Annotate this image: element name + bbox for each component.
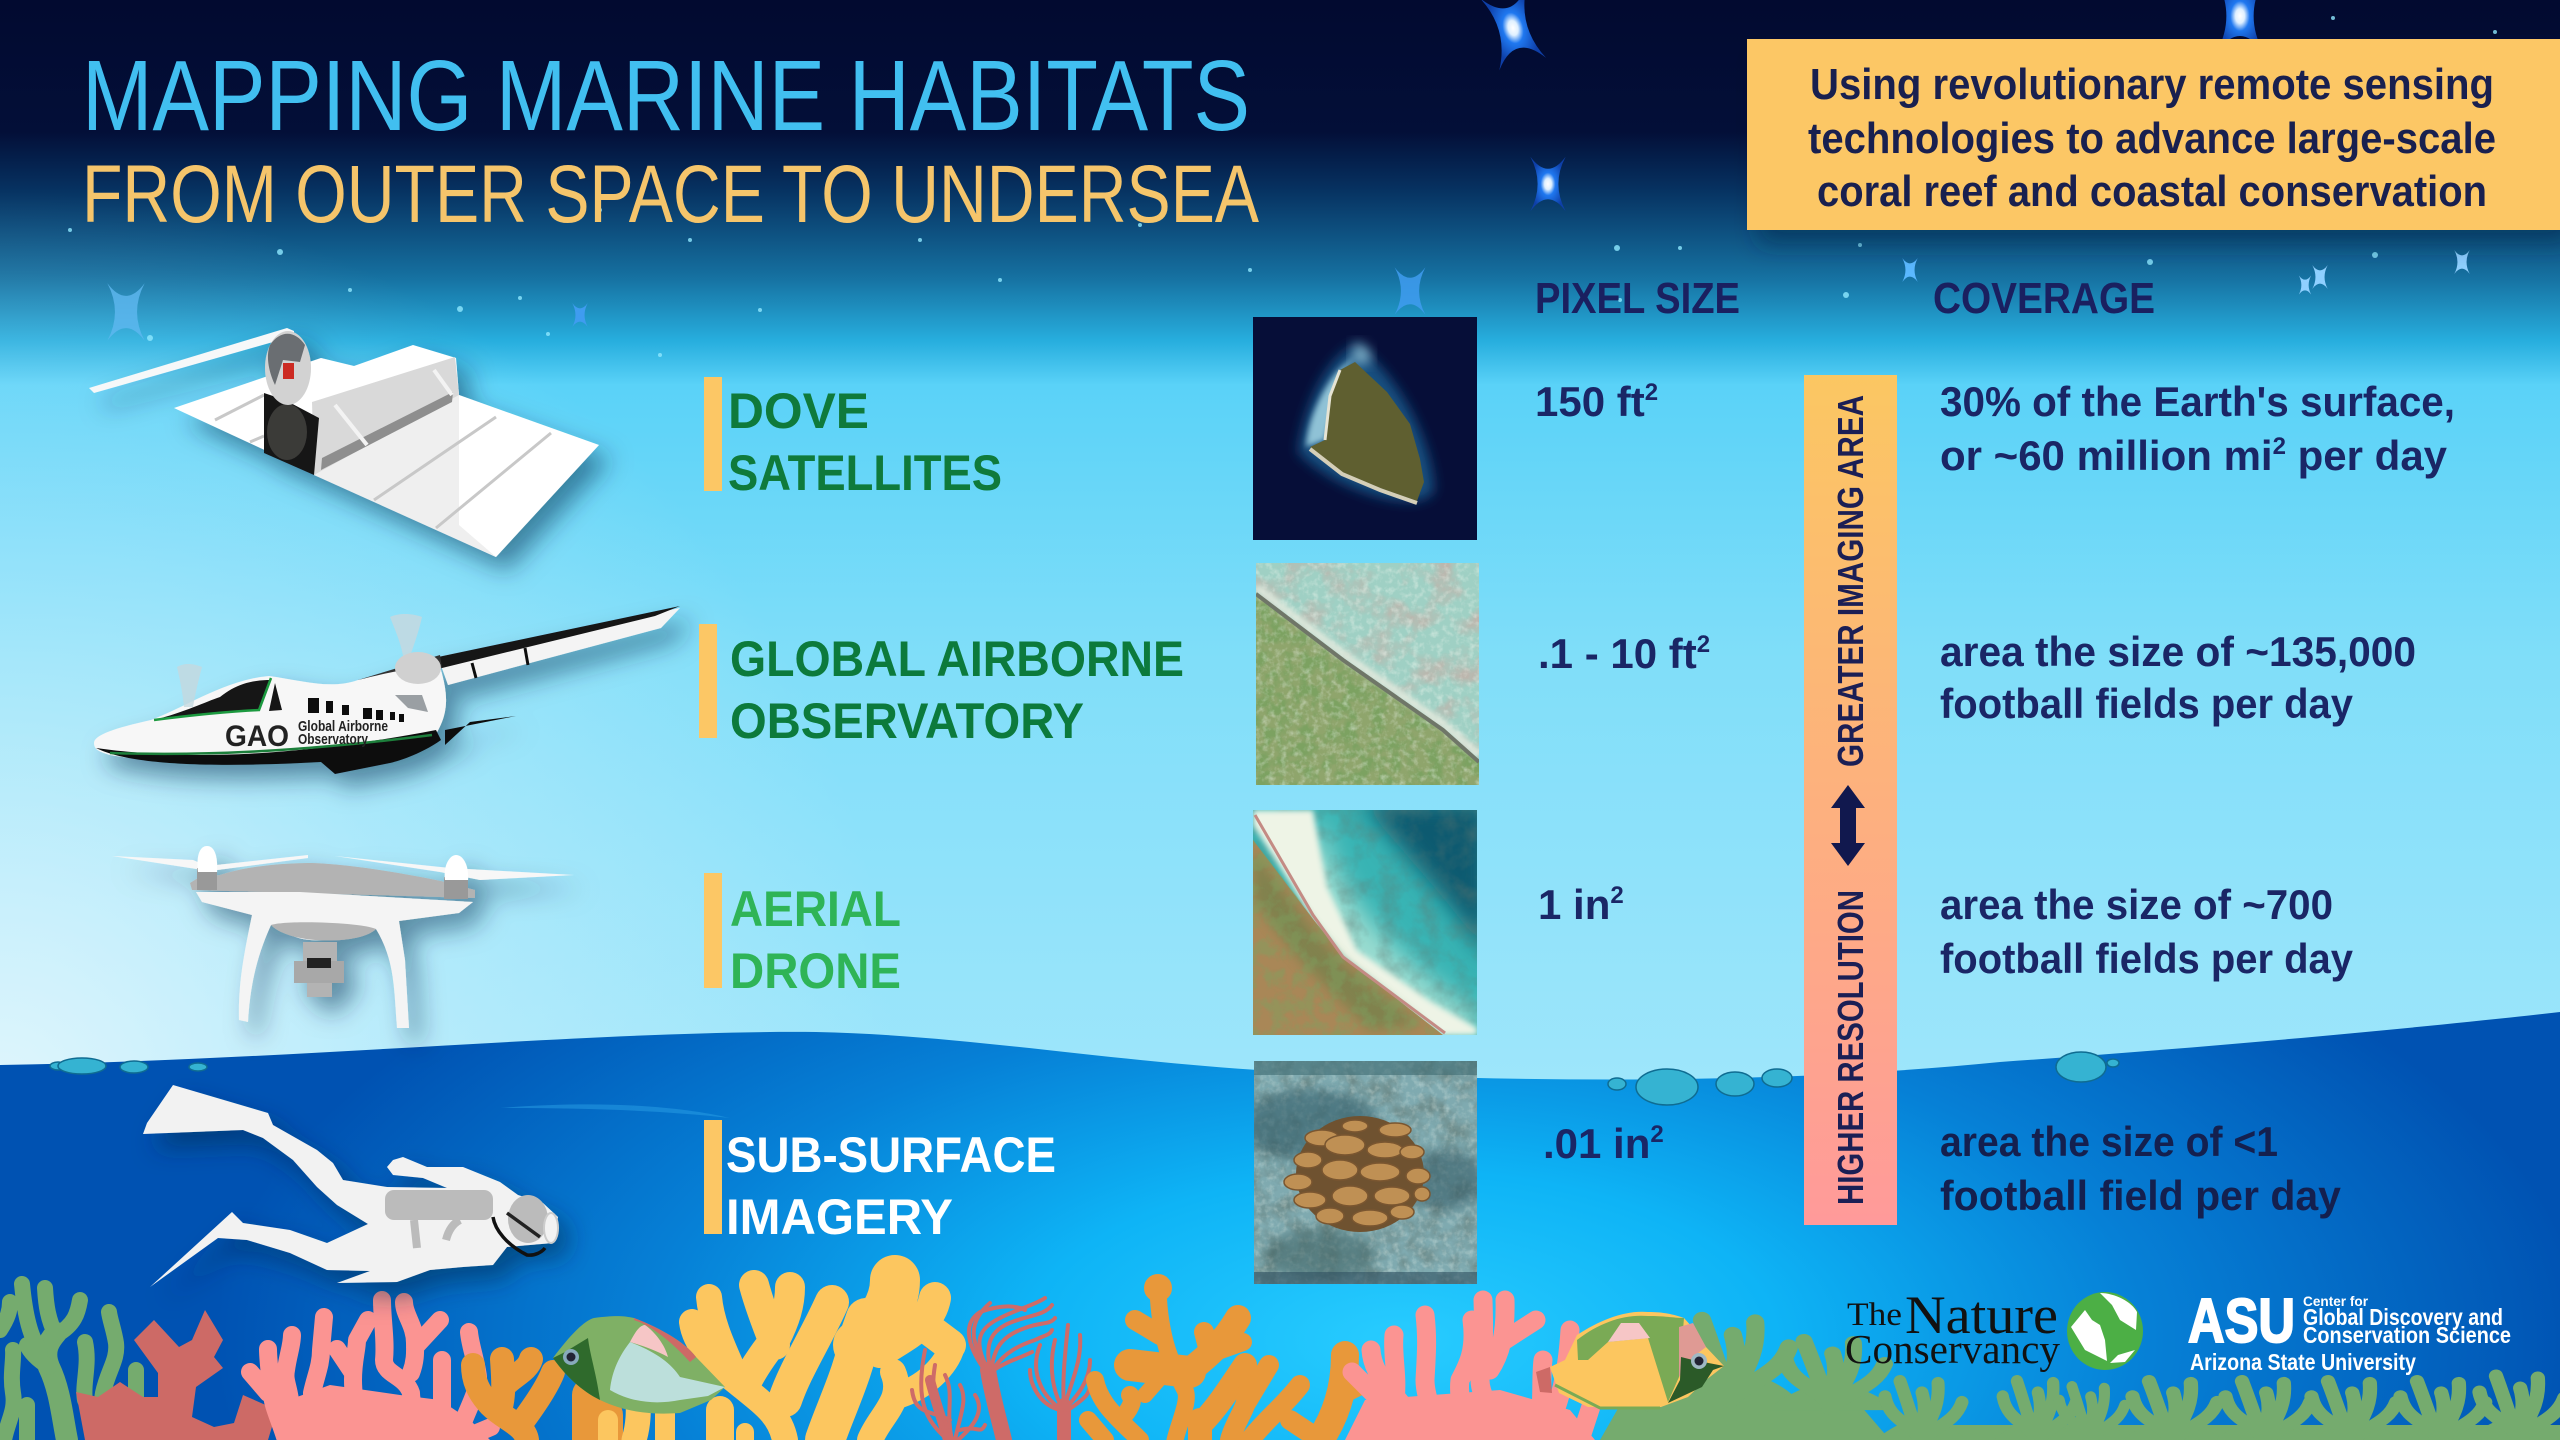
pixel size values: 2 xyxy=(1650,1121,1664,1148)
row 1 label: Dove Satellites xyxy=(704,377,1002,501)
callout box xyxy=(1747,39,2560,230)
pixel size values: 2 xyxy=(1645,379,1658,406)
callout box: technologies to advance large-scale xyxy=(1808,114,2496,163)
logo: The Nature Conservancy xyxy=(1845,1285,2143,1372)
photo: airborne shoreline xyxy=(1256,563,1479,785)
coverage text: area the size of ~700 xyxy=(1940,881,2333,928)
pixel size values xyxy=(1535,378,1710,1167)
scale bar: imaging area vs resolution: GREATER IMAGING AREA xyxy=(1830,395,1871,767)
logo: Arizona State University: ASU xyxy=(2188,1287,2295,1356)
icon: dove satellite xyxy=(89,328,599,557)
pixel size values: .1 - 10 ft xyxy=(1538,630,1697,677)
scale bar: imaging area vs resolution: HIGHER RESOLUTION xyxy=(1830,890,1871,1205)
coverage text: area the size of ~135,000 xyxy=(1940,628,2416,675)
callout box: Using revolutionary remote sensing xyxy=(1810,60,2494,109)
photo: drone shoreline xyxy=(1253,800,1490,1035)
row 3 label: Aerial Drone: AERIAL xyxy=(730,881,901,937)
pixel size values: 2 xyxy=(1610,882,1624,909)
column heading: pixel size: PIXEL SIZE xyxy=(1535,274,1740,323)
scale bar: imaging area vs resolution xyxy=(1804,375,1897,1225)
title: MAPPING MARINE HABITATS xyxy=(82,40,1250,152)
orange coral right xyxy=(1088,1278,1360,1440)
row 1 label: Dove Satellites: SATELLITES xyxy=(728,445,1002,501)
column heading: coverage: COVERAGE xyxy=(1933,274,2155,323)
sea grass xyxy=(1595,1320,2560,1440)
yellow coral xyxy=(692,1280,952,1440)
water wave highlight xyxy=(500,1104,730,1118)
pixel size values: 150 ft xyxy=(1535,378,1645,425)
pixel size values: 1 in xyxy=(1538,881,1610,928)
coverage text xyxy=(1940,378,2455,1219)
logo: Arizona State University: Global Discovery and xyxy=(2303,1304,2503,1330)
pink coral xyxy=(250,1300,491,1440)
row 4 label: Sub-surface Imagery xyxy=(704,1120,1056,1245)
coral reef xyxy=(0,1278,2560,1440)
logo: The Nature Conservancy: Nature xyxy=(1905,1285,2058,1345)
coverage text: football field per day xyxy=(1940,1172,2342,1219)
icon: double arrow xyxy=(1831,785,1865,866)
row 2 label: Global Airborne Observatory xyxy=(699,624,1184,749)
photo: satellite island xyxy=(1253,317,1477,540)
logo: Arizona State University xyxy=(2188,1287,2511,1375)
icon: global airborne observatory plane: Observatory xyxy=(298,731,369,748)
icon: scuba diver xyxy=(143,1085,558,1287)
pixel size values: 2 xyxy=(1697,631,1710,658)
sky background xyxy=(0,0,2560,1100)
orange coral xyxy=(473,1359,605,1440)
ocean water xyxy=(0,1012,2560,1440)
logo: Arizona State University: Conservation Science xyxy=(2303,1322,2511,1348)
logo: Arizona State University: Center for xyxy=(2303,1293,2369,1309)
callout box: coral reef and coastal conservation xyxy=(1817,167,2487,216)
logo: The Nature Conservancy: Conservancy xyxy=(1845,1326,2060,1372)
row 2 label: Global Airborne Observatory: OBSERVATORY xyxy=(730,693,1084,749)
icon: aerial drone xyxy=(112,846,574,1028)
row 3 label: Aerial Drone xyxy=(704,873,901,999)
coverage text: area the size of <1 xyxy=(1940,1118,2278,1165)
red coral xyxy=(76,1310,277,1440)
icon: global airborne observatory plane: Global Airborne xyxy=(298,718,388,735)
coverage text: football fields per day xyxy=(1940,935,2354,982)
logo: The Nature Conservancy: The xyxy=(1847,1297,1902,1333)
fish: parrotfish left xyxy=(553,1316,725,1414)
fish: butterflyfish right xyxy=(1536,1312,1724,1408)
icon: global airborne observatory plane: GAO xyxy=(225,720,289,753)
stars xyxy=(68,0,2497,357)
row 1 label: Dove Satellites: DOVE xyxy=(728,383,869,439)
row 4 label: Sub-surface Imagery: SUB-SURFACE xyxy=(726,1127,1056,1183)
logo: Arizona State University: Arizona State University xyxy=(2190,1349,2416,1375)
anemone coral xyxy=(912,1298,1090,1440)
coverage text: per day xyxy=(2286,432,2448,479)
coverage text: or ~60 million mi xyxy=(1940,432,2273,479)
icon: global airborne observatory plane xyxy=(94,606,680,774)
pink coral right xyxy=(1345,1300,1597,1440)
pixel size values: .01 in xyxy=(1543,1120,1650,1167)
yellow coral left xyxy=(608,1390,665,1440)
row 4 label: Sub-surface Imagery: IMAGERY xyxy=(726,1189,953,1245)
subtitle: FROM OUTER SPACE TO UNDERSEA xyxy=(82,149,1259,240)
photo: coral colony xyxy=(1240,1061,1485,1284)
coverage text: 2 xyxy=(2273,433,2286,460)
row 2 label: Global Airborne Observatory: GLOBAL AIRBORNE xyxy=(730,631,1184,687)
title xyxy=(82,40,1259,240)
coverage text: football fields per day xyxy=(1940,680,2354,727)
green coral xyxy=(0,1284,136,1440)
water bubbles xyxy=(50,1052,2119,1105)
row 3 label: Aerial Drone: DRONE xyxy=(730,943,901,999)
coverage text: 30% of the Earth's surface, xyxy=(1940,378,2455,425)
